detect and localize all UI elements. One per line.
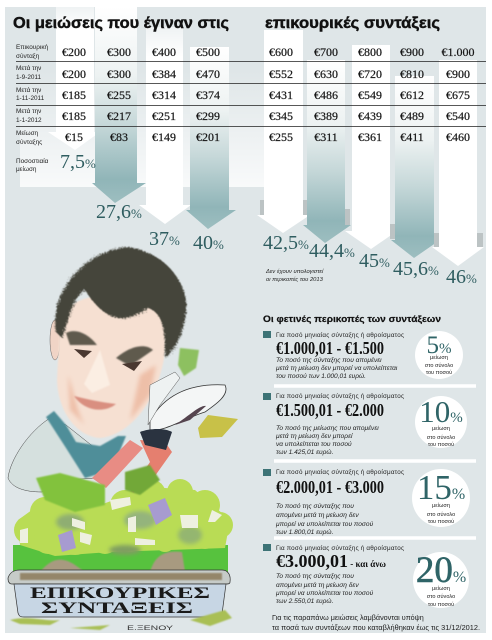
- row: reduction: €201: [196, 130, 220, 144]
- row: after 1-1-2012: €389: [314, 109, 338, 123]
- arrow 300 euro: [92, 7, 146, 203]
- badge 10%: μείωση: [432, 426, 450, 432]
- cut tier 5 percent: του ποσού των 1.000,01 ευρώ.: [276, 372, 366, 380]
- row labels: σύνταξη: [16, 52, 40, 60]
- pot: [8, 570, 230, 584]
- row: after 1-11-2011: €486: [314, 88, 338, 102]
- note on 2013: Δεν έχουν υπολογιστεί: [265, 268, 324, 275]
- cut tier 20 percent: Για ποσό μηνιαίας σύνταξης ή αθροίσματος: [276, 544, 404, 552]
- badge 10%: στο σύνολο: [427, 435, 455, 441]
- row labels: Μετά την: [16, 107, 41, 115]
- row labels: Μετά την: [16, 86, 41, 94]
- footnote: Για τις παραπάνω μειώσεις λαμβάνονται υπόψη: [272, 613, 424, 622]
- cut tier 15 percent: των 1.800,01 ευρώ.: [276, 528, 334, 536]
- row: pension: €600: [269, 45, 293, 59]
- row: reduction: €15: [65, 130, 83, 144]
- row labels: 1-9-2011: [16, 74, 42, 81]
- dividers: [274, 386, 476, 538]
- badge 5%: 5%: [426, 332, 452, 359]
- footnote: τα ποσά των συντάξεων που καταβλήθηκαν έως τις 31/12/2012.: [272, 623, 480, 632]
- row: pension: [62, 45, 474, 59]
- badge 10%: του ποσού: [428, 442, 454, 448]
- row: after 1-1-2012: [62, 109, 470, 123]
- ear: [50, 320, 60, 360]
- row: after 1-9-2011: €810: [400, 67, 424, 81]
- row: after 1-9-2011: €552: [269, 67, 293, 81]
- table row lines: [16, 62, 486, 126]
- note on 2013: οι περικοπές του 2013: [266, 276, 324, 283]
- pot label line two: ΣΥΝΤΑΞΕΙΣ: [41, 600, 193, 617]
- arrow 600 euro: [257, 30, 310, 233]
- cut tier 15 percent: €2.000,01 - €3.000: [276, 477, 384, 497]
- pot label: ΕΠΙΚΟΥΡΙΚΕΣ: [30, 585, 210, 602]
- arrow 900 euro: [391, 76, 440, 258]
- note on 2013: [265, 268, 324, 283]
- percentage labels: 45,6%: [393, 258, 439, 280]
- badge 10%: [415, 394, 467, 448]
- cut tier 20 percent: μπορεί να υπολείπεται του ποσού: [275, 589, 374, 597]
- badge 5%: στο σύνολο: [425, 363, 453, 369]
- footnote: [272, 613, 480, 632]
- cut tier 5 percent: Για ποσό μηνιαίας σύνταξης ή αθροίσματος: [276, 331, 404, 339]
- row labels: μείωση: [16, 165, 37, 173]
- cut tier 20 percent: €3.000,01 - και άνω: [276, 551, 386, 571]
- row: after 1-1-2012: €489: [400, 109, 424, 123]
- fallen leaves: [10, 610, 232, 630]
- cut tier 10 percent: μετά τη μείωση δεν μπορεί: [275, 432, 354, 440]
- row: after 1-11-2011: [62, 88, 470, 102]
- cut tier 5 percent: μετά τη μείωση δεν μπορεί να υπολείπεται: [275, 364, 398, 372]
- row: reduction: €255: [269, 130, 293, 144]
- cut tier 10 percent: Το ποσό της μείωσης που απομένει: [276, 424, 379, 432]
- row: reduction: €361: [358, 130, 382, 144]
- row: pension: €200: [62, 45, 86, 59]
- row: after 1-11-2011: €549: [358, 88, 382, 102]
- title left: Οι μειώσεις που έγιναν στις: [13, 15, 229, 32]
- percentage labels: 46%: [446, 266, 477, 288]
- cut tier 10 percent: των 1.425,01 ευρώ.: [276, 448, 334, 456]
- row: pension: €300: [107, 45, 131, 59]
- row labels: 1-1-2012: [16, 117, 42, 124]
- eyes: [74, 349, 142, 371]
- caricature: man pruning a bonsai of euro notes: [8, 247, 238, 632]
- cut tier 10 percent: €1.500,01 - €2.000: [276, 400, 384, 420]
- badge 20%: 20%: [416, 550, 466, 591]
- badge 5%: [415, 331, 463, 379]
- percentage labels: 27,6%: [96, 201, 142, 223]
- badge 20%: στο σύνολο: [427, 594, 455, 600]
- badge 15%: στο σύνολο: [427, 512, 455, 518]
- row: after 1-11-2011: €255: [107, 88, 131, 102]
- badge 15%: [412, 468, 470, 527]
- row: pension: €700: [314, 45, 338, 59]
- row: after 1-11-2011: €374: [196, 88, 220, 102]
- row labels: σύνταξης: [16, 138, 42, 146]
- row: reduction: €311: [314, 130, 338, 144]
- arrow shadows: [260, 200, 483, 247]
- arrow 800 euro: [345, 45, 397, 249]
- left brow: [66, 331, 97, 345]
- cut tier 5 percent: [263, 331, 463, 380]
- arrow 200 euro: [48, 7, 100, 150]
- table values: [62, 45, 474, 144]
- percentage labels: 7,5%: [60, 151, 96, 173]
- row: pension: €400: [152, 45, 176, 59]
- arrows: reduction per pension level: [48, 7, 484, 266]
- small note: [178, 348, 199, 376]
- row: after 1-1-2012: €299: [196, 109, 220, 123]
- row: after 1-9-2011: [62, 67, 470, 81]
- arrow 1000 euro: [432, 60, 484, 266]
- arrow 500 euro: [186, 47, 236, 229]
- heading: this year's cuts: Οι φετινές περικοπές των συντάξεων: [263, 314, 441, 325]
- cut tier 10 percent: [263, 392, 467, 456]
- row: pension: €1.000: [442, 45, 474, 59]
- title right: επικουρικές συντάξεις: [265, 15, 440, 32]
- overalls: [46, 411, 126, 478]
- trunk: [40, 552, 185, 572]
- row: pension: €800: [358, 45, 382, 59]
- euro note on shears: [198, 415, 238, 438]
- percentage labels: 37%: [149, 228, 180, 250]
- row labels: Μείωση: [16, 129, 39, 137]
- cut tier 15 percent: μπορεί να υπολείπεται του ποσού: [275, 520, 374, 528]
- row: reduction: €460: [446, 130, 470, 144]
- row: after 1-1-2012: €185: [62, 109, 86, 123]
- row: reduction: €83: [110, 130, 128, 144]
- cut tier 20 percent: απομένει μετά τη μείωση δεν: [276, 581, 359, 589]
- row: after 1-11-2011: €185: [62, 88, 86, 102]
- cut tier 10 percent: να υπολείπεται του ποσού: [276, 440, 352, 448]
- gloves: [36, 473, 105, 512]
- row: after 1-11-2011: €431: [269, 88, 293, 102]
- nose: [84, 350, 110, 393]
- badge 20%: του ποσού: [428, 602, 454, 608]
- percentage labels: 44,4%: [309, 240, 355, 262]
- row labels: Επικουρική: [16, 44, 49, 51]
- row: after 1-11-2011: €314: [152, 88, 176, 102]
- cut tier 15 percent: απομένει μετά τη μείωση δεν: [276, 511, 359, 519]
- row: after 1-9-2011: €900: [446, 67, 470, 81]
- foliage shadows: [56, 511, 202, 555]
- signature: Ε.ΞΕΝΟΥ: [127, 626, 173, 632]
- cheek shadows: [68, 365, 156, 425]
- percentage labels: 40%: [193, 232, 224, 254]
- row: after 1-11-2011: €675: [446, 88, 470, 102]
- row: reduction: €411: [400, 130, 424, 144]
- cut tier 15 percent: [263, 468, 470, 536]
- face: [57, 294, 166, 438]
- row labels: [16, 44, 49, 173]
- cut tier 20 percent: Το ποσό της σύνταξης που: [276, 572, 354, 580]
- row: after 1-1-2012: €439: [358, 109, 382, 123]
- badge 5%: του ποσού: [426, 370, 452, 376]
- row: after 1-1-2012: €217: [107, 109, 131, 123]
- badge 15%: 15%: [417, 468, 465, 507]
- jacket: [8, 418, 100, 492]
- row labels: 1-11-2011: [16, 95, 45, 102]
- badge 10%: 10%: [419, 394, 463, 429]
- row: after 1-9-2011: €200: [62, 67, 86, 81]
- row labels: Ποσοστιαία: [16, 157, 49, 165]
- cut tier 5 percent: €1.000,01 - €1.500: [276, 338, 384, 358]
- hair: [55, 247, 186, 358]
- badge 15%: μείωση: [432, 503, 450, 509]
- row: pension: €500: [196, 45, 220, 59]
- cut tier 10 percent: Για ποσό μηνιαίας σύνταξης ή αθροίσματος: [276, 392, 404, 400]
- bonsai foliage: [14, 479, 233, 556]
- row: after 1-9-2011: €720: [358, 67, 382, 81]
- row: pension: €900: [400, 45, 424, 59]
- row: after 1-9-2011: €470: [196, 67, 220, 81]
- shears blades: [150, 385, 226, 430]
- badge 5%: μείωση: [430, 355, 448, 361]
- right brow: [116, 346, 153, 366]
- row: after 1-1-2012: €345: [269, 109, 293, 123]
- cut tier 5 percent: Το ποσό της σύνταξης που απομένει: [276, 356, 382, 364]
- row: after 1-9-2011: €300: [107, 67, 131, 81]
- cut tier 15 percent: Για ποσό μηνιαίας σύνταξης ή αθροίσματος: [276, 468, 404, 476]
- bright green backdrop: [13, 545, 228, 573]
- percentage labels: [60, 151, 477, 288]
- row: reduction: €149: [152, 130, 176, 144]
- row: after 1-9-2011: €384: [152, 67, 176, 81]
- row: after 1-9-2011: €630: [314, 67, 338, 81]
- percentage labels: 45%: [359, 250, 390, 272]
- arrow 400 euro: [139, 27, 191, 224]
- row: reduction: [65, 130, 470, 144]
- row labels: Μετά την: [16, 64, 41, 72]
- row: after 1-1-2012: €251: [152, 109, 176, 123]
- cut tier 20 percent: [263, 544, 469, 608]
- badge 20%: μείωση: [432, 586, 450, 592]
- mouth: [74, 396, 116, 410]
- percentage labels: 42,5%: [263, 232, 309, 254]
- badge 20%: [413, 550, 469, 608]
- arrow 700 euro: [303, 60, 351, 243]
- euro notes: [20, 497, 222, 552]
- badge 15%: του ποσού: [428, 519, 454, 525]
- row: after 1-11-2011: €612: [400, 88, 424, 102]
- row: after 1-1-2012: €540: [446, 109, 470, 123]
- cut tier 15 percent: Το ποσό της σύνταξης που: [276, 502, 354, 510]
- cut tier 20 percent: των 2.550,01 ευρώ.: [276, 597, 334, 605]
- shears handles: [92, 440, 143, 488]
